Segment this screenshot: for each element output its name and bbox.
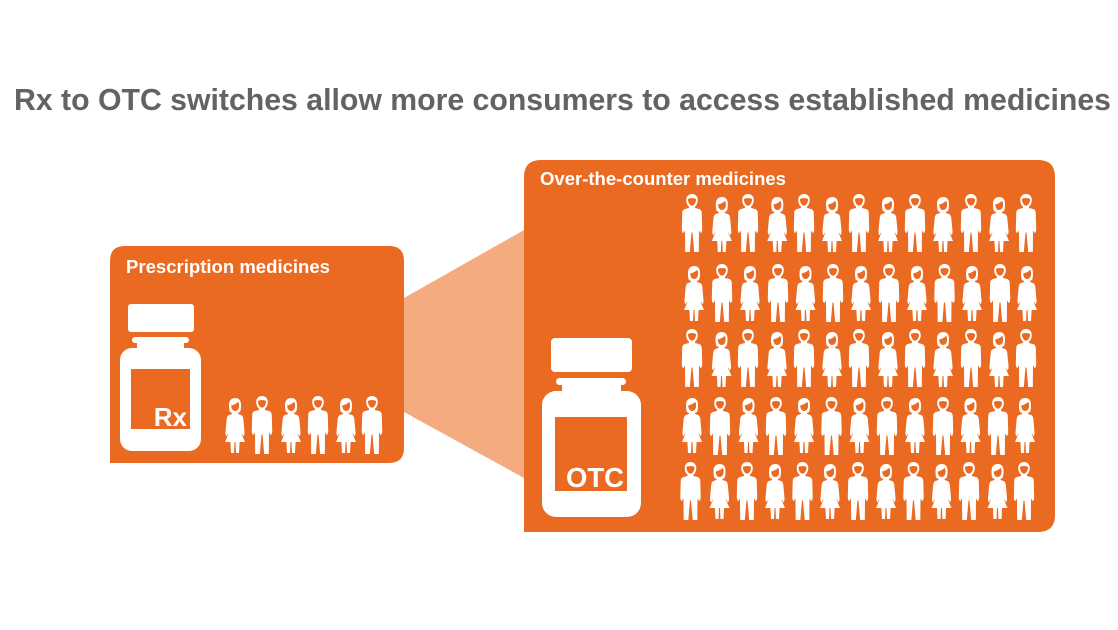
icon: OTC bottle: OTC [566, 462, 624, 493]
people: row 1 [682, 194, 1036, 252]
people: row 2 [684, 264, 1037, 322]
connector: widening band from Rx to OTC [404, 230, 524, 478]
icon: Rx bottle: Rx [154, 402, 188, 432]
icon: OTC bottle [542, 338, 641, 517]
heading: over-the-counter medicines: Over-the-counter medicines [540, 168, 786, 189]
people: row 4 [682, 397, 1035, 455]
panel: over-the-counter medicines [524, 160, 1055, 532]
people: six prescription users [225, 396, 382, 454]
icon: Rx bottle [120, 304, 201, 451]
people: row 5 [680, 462, 1034, 520]
panel: prescription medicines [110, 246, 404, 463]
heading: prescription medicines: Prescription medicines [126, 256, 330, 277]
people: row 3 [682, 329, 1036, 387]
title: Rx to OTC switches allow more consumers to access established medicines [14, 83, 1111, 117]
